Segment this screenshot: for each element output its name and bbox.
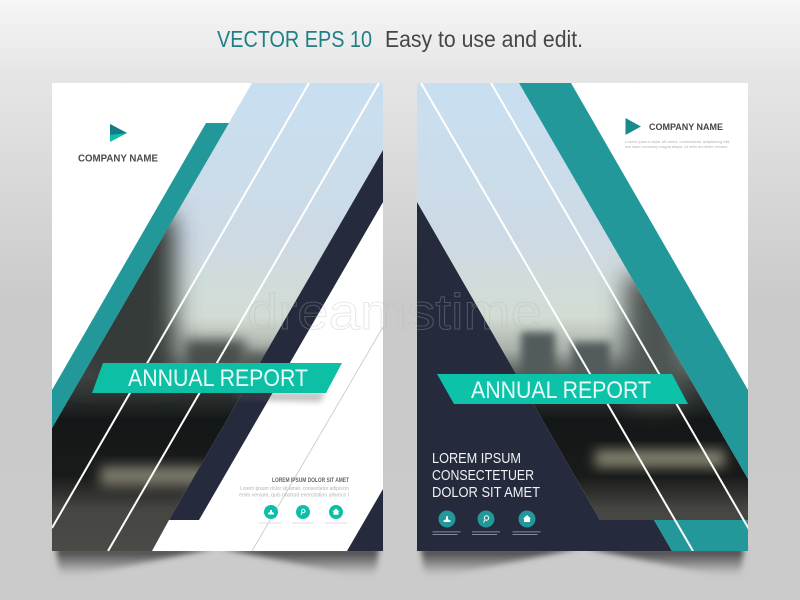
blurred city photo: [52, 83, 383, 551]
text block: right lorem ipsum: LOREM IPSUM: [432, 451, 521, 467]
text block: right small print: Lorem ipsum dolor sit amet, consectetur adipiscing elit,: [625, 139, 730, 144]
panel: left brochure cover: [52, 83, 383, 551]
banner: right annual report: ANNUAL REPORT: [471, 377, 651, 404]
text block: right small print: [625, 139, 730, 149]
panel: right brochure cover: [417, 83, 750, 551]
text block: right lorem ipsum: [432, 451, 540, 501]
banner: left annual report: ANNUAL REPORT: [128, 365, 308, 392]
navy triangle: [417, 202, 672, 551]
navy diagonal band: [169, 150, 383, 520]
thin grey line: [252, 327, 383, 551]
watermark: dreamstime: [247, 284, 542, 340]
text block: right small print: sed diam nonummy magna aliqua. Ut enim ad minim veniam,: [625, 144, 728, 149]
banner shadow: left: [230, 392, 326, 402]
icon: search: [292, 505, 314, 524]
text block: left lorem ipsum: LOREM IPSUM DOLOR SIT AMET: [272, 478, 349, 484]
white diagonal lines: [421, 83, 750, 551]
company name: left: COMPANY NAME: [78, 154, 158, 164]
logo: right triangle: [626, 118, 641, 135]
page shadows: [56, 548, 744, 580]
teal diagonal band: [519, 83, 748, 479]
icon: search: [472, 510, 500, 535]
navy corner triangle: [347, 489, 383, 551]
icon: home: [325, 505, 347, 524]
company name: right: COMPANY NAME: [649, 122, 723, 132]
text block: right lorem ipsum: DOLOR SIT AMET: [432, 485, 540, 501]
teal diagonal band: [52, 123, 229, 428]
text block: left lorem ipsum: enim veniam, quis nostrud exercitation ullamco l: [239, 492, 349, 498]
heading: Easy to use and edit.: [385, 26, 583, 52]
heading: VECTOR EPS 10: [217, 26, 372, 52]
logo: left triangle: [110, 124, 127, 142]
white diagonal lines: [52, 83, 379, 551]
teal bottom block: [654, 520, 748, 551]
heading: [217, 26, 583, 52]
icons: left row: [259, 505, 347, 524]
text block: right lorem ipsum: CONSECTETUER: [432, 468, 534, 484]
icon: home: [512, 510, 540, 535]
icons: right row: [432, 510, 540, 535]
text block: left lorem ipsum: [239, 478, 349, 498]
icon: person: [259, 505, 281, 524]
icon: person: [432, 510, 460, 535]
blurred city photo: [417, 83, 748, 551]
text block: left lorem ipsum: Lorem ipsum dolor sit amet, consectetur adipiscin: [240, 486, 349, 492]
